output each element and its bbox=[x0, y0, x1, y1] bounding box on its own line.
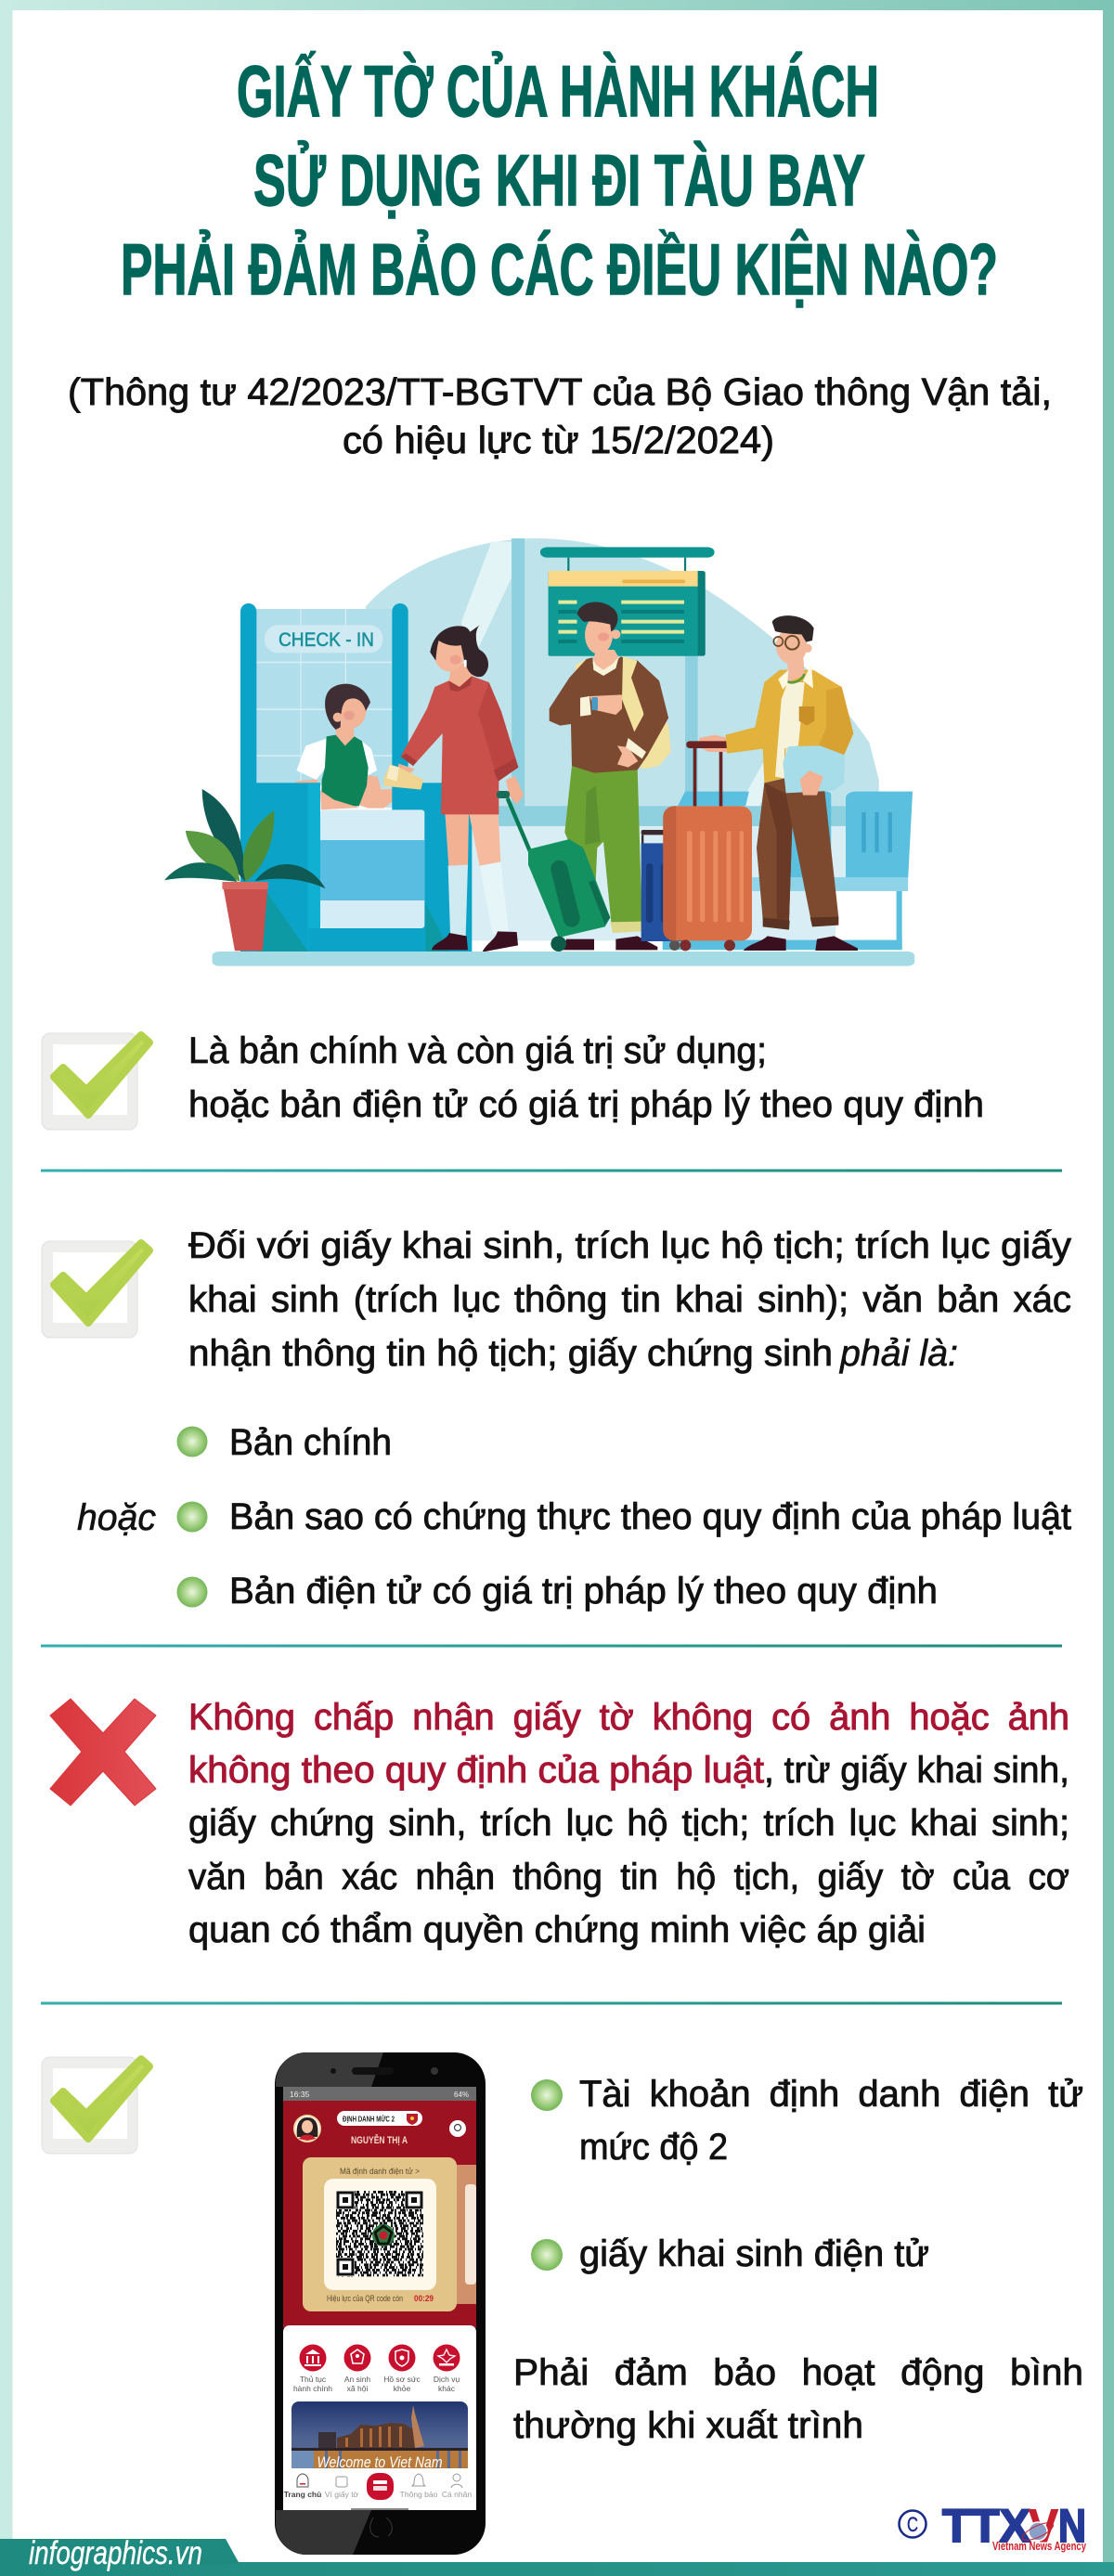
footer tab: infographics.vn: infographics.vn bbox=[29, 2535, 202, 2571]
screen: status bar: 16:35 bbox=[290, 2090, 310, 2099]
check-in sign text: CHECK - IN bbox=[278, 629, 374, 651]
text: operating requirement: thường khi xuất trình bbox=[513, 2405, 863, 2446]
service icon: other services: khác bbox=[438, 2384, 456, 2393]
icon: check box bbox=[42, 1241, 149, 1338]
phone mockup bbox=[275, 2052, 486, 2555]
bottom navigation: Cá nhân bbox=[442, 2490, 472, 2499]
orange suitcase bbox=[663, 735, 752, 951]
text: condition 1: hoặc bản điện tử có giá trị pháp lý theo quy định bbox=[188, 1084, 984, 1125]
text: condition 3: văn bản xác nhận thông tin hộ tịch, giấy tờ của cơ bbox=[188, 1857, 1069, 1897]
text: operating requirement bbox=[513, 2352, 1083, 2446]
bottom navigation: Thông báo bbox=[400, 2490, 438, 2499]
man in yellow jacket bbox=[726, 615, 858, 951]
service icon: administrative procedures bbox=[293, 2345, 332, 2393]
blue suitcase bbox=[641, 830, 694, 951]
text: condition 3: , trừ giấy khai sinh, bbox=[764, 1750, 1069, 1791]
list: accepted forms bbox=[77, 1422, 1071, 1612]
screen: red header bbox=[283, 2101, 476, 2328]
counter desk bbox=[240, 783, 472, 951]
title bbox=[121, 50, 998, 310]
item 1: original document bbox=[42, 1030, 984, 1130]
screen: QR card bbox=[303, 2157, 476, 2311]
service icon: social security: An sinh bbox=[344, 2375, 370, 2384]
logo: TTXVN Vietnam News Agency: V bbox=[1029, 2500, 1059, 2552]
woman in red dress bbox=[383, 625, 534, 952]
text: condition 2: phải là: bbox=[839, 1333, 958, 1374]
screen: red header: ĐỊNH DANH MỨC 2 bbox=[343, 2113, 395, 2124]
check-in booth bbox=[240, 603, 408, 951]
item 4: electronic ID bbox=[42, 2052, 1083, 2555]
logo: TTXVN Vietnam News Agency: TTX bbox=[942, 2500, 1030, 2552]
people at the check-in desk bbox=[240, 603, 534, 952]
list: electronic ID options: Tài khoản định danh điện tử bbox=[579, 2074, 1083, 2115]
list: electronic ID options: mức độ 2 bbox=[579, 2127, 728, 2168]
service icon: health records bbox=[383, 2345, 421, 2393]
list: accepted forms: hoặc bbox=[77, 1497, 156, 1538]
plant and floor bbox=[164, 789, 914, 966]
screen: QR card: Hiệu lực của QR code còn bbox=[327, 2294, 403, 2304]
text: condition 1: Là bản chính và còn giá trị sử dụng; bbox=[188, 1030, 767, 1071]
illustration: airport check-in counter bbox=[164, 538, 914, 966]
item 3: rejected documents bbox=[50, 1697, 1069, 1950]
green suitcase bbox=[528, 839, 610, 951]
service icon: social security: xã hội bbox=[347, 2384, 368, 2393]
icon: red cross bbox=[50, 1699, 156, 1806]
screen: status bar: 64% bbox=[454, 2091, 469, 2099]
screen: red header: NGUYỄN THỊ A bbox=[351, 2134, 408, 2146]
list: electronic ID options bbox=[531, 2074, 1083, 2274]
banner photo: Ho Chi Minh City at night bbox=[283, 2401, 476, 2510]
text: condition 3 bbox=[188, 1697, 1069, 1950]
item 2: birth documents bbox=[42, 1225, 1071, 1612]
service icon: social security bbox=[343, 2345, 371, 2393]
screen: QR card: Mã định danh điện tử > bbox=[340, 2167, 420, 2177]
text: condition 1 bbox=[188, 1030, 984, 1125]
service icon: other services: Dịch vụ bbox=[434, 2375, 460, 2384]
text: condition 3: giấy chứng sinh, trích lục hộ tịch; trích lục khai sinh; bbox=[188, 1803, 1069, 1844]
text: condition 2: khai sinh (trích lục thông tin khai sinh); văn bản xác bbox=[188, 1279, 1071, 1320]
man in brown sweater bbox=[550, 602, 671, 950]
text: condition 2 bbox=[188, 1225, 1071, 1374]
logo: TTXVN Vietnam News Agency: N bbox=[1058, 2500, 1086, 2552]
service icon: health records: khỏe bbox=[394, 2384, 410, 2393]
subtitle: legal source: có hiệu lực từ 15/2/2024) bbox=[343, 419, 774, 461]
screen: white service panel bbox=[283, 2325, 476, 2510]
service icon: other services bbox=[433, 2345, 460, 2393]
service icon: health records: Hồ sơ sức bbox=[383, 2375, 421, 2384]
service icon: administrative procedures: Thủ tục bbox=[300, 2375, 327, 2384]
screen: status bar bbox=[283, 2087, 476, 2101]
text: condition 3: không theo quy định của pháp luật bbox=[188, 1750, 764, 1791]
logo: TTXVN Vietnam News Agency: C bbox=[907, 2513, 918, 2536]
icon: check box bbox=[42, 2057, 149, 2154]
service icon: administrative procedures: hành chính bbox=[293, 2384, 332, 2393]
list: accepted forms: Bản sao có chứng thực theo quy định của pháp luật bbox=[229, 1496, 1071, 1537]
receptionist bbox=[295, 684, 401, 809]
banner photo: Ho Chi Minh City at night: Welcome to Viet Nam bbox=[317, 2453, 442, 2471]
QR code bbox=[336, 2191, 423, 2276]
subtitle: legal source: (Thông tư 42/2023/TT-BGTVT của Bộ Giao thông Vận tải, bbox=[68, 370, 1052, 413]
background: terminal window, board and seats bbox=[366, 538, 913, 950]
flight board bbox=[540, 547, 715, 656]
potted plant bbox=[164, 789, 326, 951]
floor bbox=[213, 951, 914, 966]
text: condition 3: Không chấp nhận giấy tờ không có ảnh hoặc ảnh bbox=[188, 1697, 1069, 1738]
screen: QR card: 00:29 bbox=[414, 2294, 434, 2304]
bottom navigation bbox=[284, 2473, 472, 2510]
waiting chairs bbox=[663, 792, 913, 950]
subtitle: legal source bbox=[68, 370, 1052, 461]
bottom navigation: Ví giấy tờ bbox=[325, 2490, 359, 2499]
text: operating requirement: Phải đảm bảo hoạt động bình bbox=[513, 2352, 1083, 2393]
list: accepted forms: Bản chính bbox=[229, 1422, 392, 1463]
bottom navigation: Trang chủ bbox=[284, 2490, 321, 2499]
icon: check box bbox=[42, 1033, 149, 1130]
logo: TTXVN Vietnam News Agency bbox=[899, 2500, 1087, 2553]
text: condition 3: quan có thẩm quyền chứng minh việc áp giải bbox=[188, 1909, 926, 1950]
passengers and luggage bbox=[528, 602, 858, 951]
list: electronic ID options: giấy khai sinh điện tử bbox=[579, 2233, 929, 2274]
text: condition 2: nhận thông tin hộ tịch; giấy chứng sinh bbox=[188, 1333, 833, 1374]
list: accepted forms: Bản điện tử có giá trị pháp lý theo quy định bbox=[229, 1571, 938, 1612]
text: condition 2: Đối với giấy khai sinh, trích lục hộ tịch; trích lục giấy bbox=[188, 1225, 1071, 1266]
